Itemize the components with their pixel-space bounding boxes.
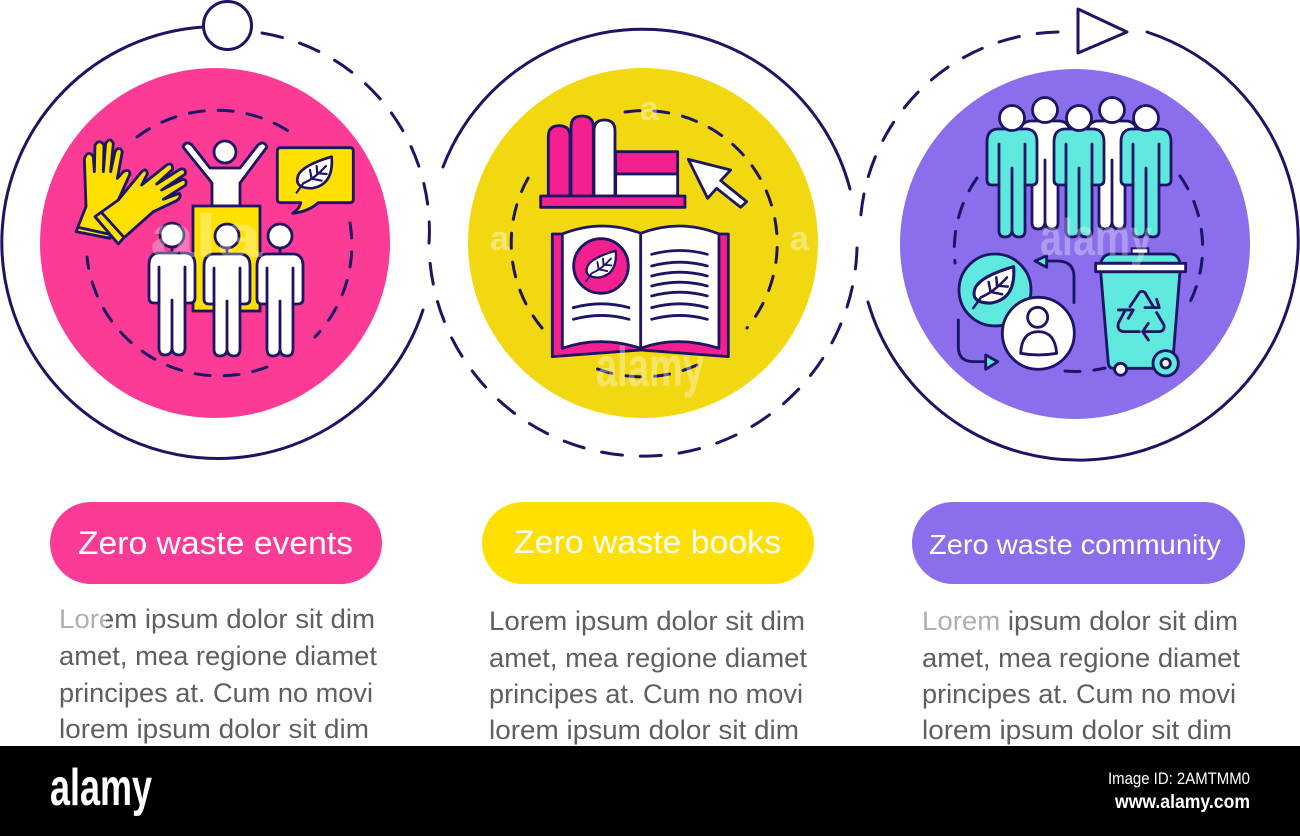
watermark: alamy [1040, 209, 1152, 267]
panel: books circle [468, 68, 818, 418]
panel: events circle [40, 68, 390, 418]
text block: community description [922, 606, 1240, 745]
panel: community ring [860, 9, 1298, 460]
icon: recycling bin [1096, 248, 1186, 376]
label pill: books [482, 502, 814, 584]
watermark fade over text [58, 606, 999, 632]
icon: three people [149, 223, 303, 356]
dashed ring: community [954, 176, 1203, 371]
footer bar [0, 746, 1300, 836]
text block: events description: lorem ipsum dolor sit dim [59, 714, 369, 744]
icon: speaker on podium [183, 141, 267, 311]
text block: books description: lorem ipsum dolor sit dim [489, 715, 799, 745]
icon: recycle symbol [1118, 291, 1164, 340]
icon: cursor arrow [688, 159, 747, 207]
watermark fragments: a [640, 90, 660, 128]
text block: community description: Lorem ipsum dolor sit dim [922, 606, 1238, 636]
icon: crowd of five people [987, 98, 1171, 237]
label pill: books: Zero waste books [514, 524, 781, 560]
dashed ring: books [511, 111, 777, 377]
icon: rubber gloves [76, 140, 186, 244]
icon: leaf and person cycle [958, 254, 1074, 369]
watermark fragments: a [790, 220, 810, 258]
label pill: events [50, 502, 382, 584]
text block: books description: amet, mea regione diamet [489, 643, 807, 673]
icon: speech bubble with leaf [277, 148, 353, 213]
text block: events description: Lorem ipsum dolor sit dim [59, 604, 375, 634]
label pill: community: Zero waste community [929, 529, 1221, 560]
label pill: community [912, 502, 1245, 584]
panel: events ring [2, 2, 429, 458]
text block: books description: Lorem ipsum dolor sit dim [489, 606, 805, 636]
watermark fragments [490, 90, 810, 258]
text block: events description: amet, mea regione diamet [59, 641, 377, 671]
watermark: ala [150, 203, 263, 270]
watermark: alamy [596, 335, 704, 398]
text block: community description: principes at. Cum no movi [922, 679, 1236, 709]
footer url: www.alamy.com [1114, 792, 1250, 813]
watermark fragments: a [490, 220, 510, 258]
text block: community description: amet, mea regione diamet [922, 643, 1240, 673]
panel: books ring [430, 29, 857, 456]
text block: events description [59, 604, 377, 744]
icon: open book [552, 226, 728, 357]
text block: books description [489, 606, 807, 745]
panel: community circle [900, 69, 1250, 419]
text block: community description: lorem ipsum dolor sit dim [922, 715, 1232, 745]
icon: bookshelf [541, 116, 685, 207]
footer image id: Image ID: 2AMTMM0 [1108, 769, 1250, 788]
text block: events description: principes at. Cum no movi [59, 678, 373, 708]
footer logo: alamy [50, 759, 152, 817]
text block: books description: principes at. Cum no movi [489, 679, 803, 709]
label pill: events: Zero waste events [78, 525, 353, 561]
dashed ring: events [87, 110, 352, 376]
